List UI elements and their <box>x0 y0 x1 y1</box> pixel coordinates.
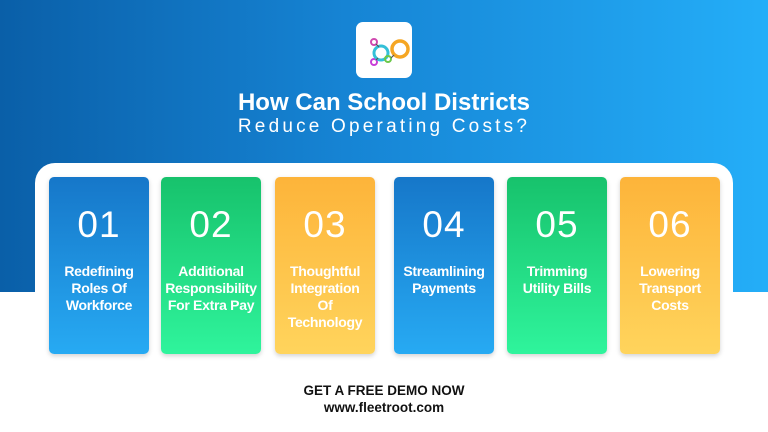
card 03: Of <box>318 297 332 313</box>
card 01: Roles Of <box>71 280 127 296</box>
card 06: Costs <box>651 297 689 313</box>
card 01: 01 <box>77 204 121 245</box>
card 02: Responsibility <box>165 280 257 296</box>
card 01: Redefining <box>64 263 134 279</box>
card 01: Workforce <box>66 297 132 313</box>
blue header background <box>0 0 768 292</box>
card 04: 04 <box>422 204 466 245</box>
card 06 <box>620 177 720 354</box>
card 02: Additional <box>178 263 244 279</box>
card 03: Integration <box>290 280 360 296</box>
card 03: 03 <box>303 204 347 245</box>
card 05 <box>507 177 607 354</box>
card 05: 05 <box>535 204 579 245</box>
subtitle: Reduce Operating Costs? <box>238 116 530 137</box>
website: www.fleetroot.com <box>324 400 444 415</box>
card 01 <box>49 177 149 354</box>
card 06: Transport <box>639 280 701 296</box>
card 04: Streamlining <box>403 263 485 279</box>
card 06: 06 <box>648 204 692 245</box>
title: How Can School Districts <box>238 89 530 116</box>
card 02 <box>161 177 261 354</box>
logo <box>356 22 412 78</box>
card 05: Trimming <box>527 263 587 279</box>
card 03 <box>275 177 375 354</box>
white panel <box>35 163 733 432</box>
card 04: Payments <box>412 280 476 296</box>
card 02: 02 <box>189 204 233 245</box>
card 04 <box>394 177 494 354</box>
card 05: Utility Bills <box>523 280 591 296</box>
card 06: Lowering <box>640 263 700 279</box>
call to action: GET A FREE DEMO NOW <box>304 383 464 398</box>
card 03: Technology <box>288 314 362 330</box>
card 03: Thoughtful <box>290 263 360 279</box>
card 02: For Extra Pay <box>168 297 254 313</box>
